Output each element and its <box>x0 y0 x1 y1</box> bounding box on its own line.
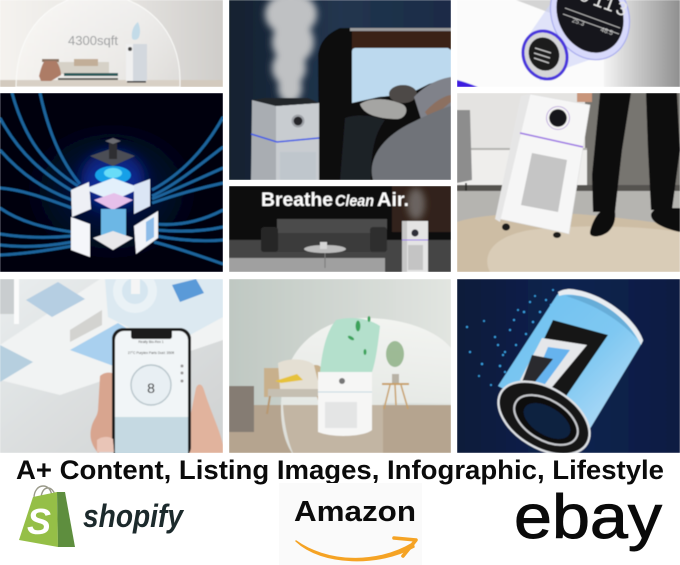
panel: display close-up: 48.5 <box>600 26 614 37</box>
label: 4300sqft: 4300sqft <box>68 33 118 48</box>
panel: living room with leaves dome <box>229 279 451 453</box>
large display <box>550 0 630 61</box>
panel: Breathe Clean Air lifestyle <box>229 186 451 272</box>
table and plant <box>382 341 409 409</box>
sofa <box>261 219 387 268</box>
purifier <box>318 372 372 436</box>
top fan <box>71 138 158 257</box>
zoom cone <box>530 6 588 81</box>
panel: filter cartridge with particles <box>457 279 680 469</box>
mist <box>265 0 317 103</box>
small display <box>520 29 570 82</box>
purifier body <box>251 100 276 180</box>
bottom ring <box>486 367 602 469</box>
cutaway layers <box>522 320 608 405</box>
sofa <box>39 59 118 81</box>
chair <box>264 359 324 414</box>
floor seen through bubble <box>283 405 383 453</box>
icon: orange smile arrow <box>296 541 414 561</box>
icon: shopping bag: S <box>27 501 51 542</box>
panel: coverage dome room photo <box>0 0 223 87</box>
panel: app control floor plan: 27°C Purplex Parts Dust: 350ft <box>128 351 174 355</box>
rug <box>457 213 680 272</box>
side panels <box>71 182 91 217</box>
panel: purifier with mist in bedroom <box>229 0 451 180</box>
chair <box>457 110 472 183</box>
panel: app control floor plan <box>0 269 223 458</box>
filter core <box>100 208 127 236</box>
headline: Clean <box>335 193 374 210</box>
display readings <box>580 0 628 16</box>
Amazon wordmark: Amazon <box>294 496 416 528</box>
green leaves spray <box>320 318 380 372</box>
panel: app control floor plan: Really Bio-Rex 1 <box>138 340 164 344</box>
cartridge body <box>498 290 643 432</box>
logo: shopify <box>19 486 185 547</box>
floor plan rooms <box>0 269 223 395</box>
shopify wordmark: shopify <box>83 498 185 534</box>
panel: display close-up: 25.3 <box>571 17 586 28</box>
headline: Air. <box>377 190 409 211</box>
logo: ebay: ebay <box>514 483 662 552</box>
logo: Amazon <box>279 483 422 565</box>
panel: exploded filter view with airflow <box>0 93 223 272</box>
particles <box>466 289 554 390</box>
bubble <box>281 318 451 453</box>
man sleeping <box>340 77 451 180</box>
purifier <box>500 94 590 234</box>
airflow lines <box>0 93 223 264</box>
panel: display close-up <box>457 0 680 88</box>
legs <box>577 93 680 236</box>
purifier with mist <box>407 188 425 220</box>
phone <box>112 328 191 458</box>
icon: shopping bag <box>19 486 75 547</box>
heading: A+ Content, Listing Images, Infographic, Lifestyle <box>16 455 664 485</box>
headline: Breathe <box>261 190 333 211</box>
purifier <box>126 22 147 83</box>
panel: purifier tilted by person <box>457 93 680 272</box>
panel: app control floor plan: 8 <box>147 380 155 396</box>
hand back <box>90 373 112 453</box>
